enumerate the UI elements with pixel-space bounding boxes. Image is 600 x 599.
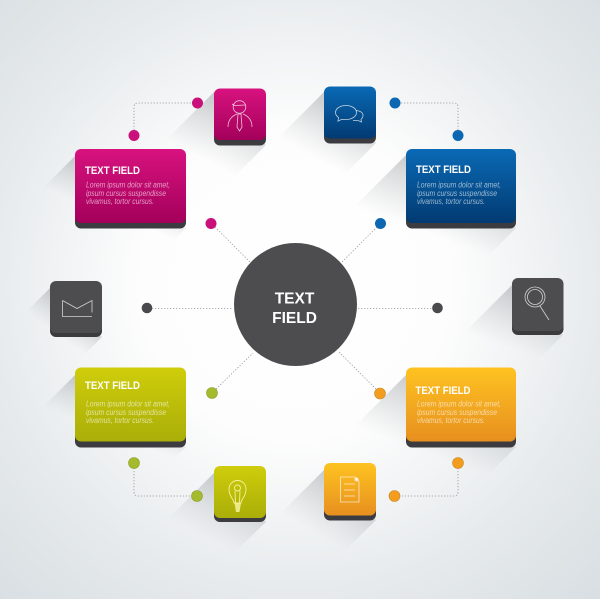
panel: blue text field: vivamus, tortor cursus. [417, 197, 485, 206]
panel: lime text field: Lorem ipsum dolor sit amet, [86, 400, 170, 408]
central label: TEXT [275, 290, 315, 308]
panel: lime text field: ipsum cursus suspendisse [86, 408, 167, 417]
panel: lime text field: vivamus, tortor cursus. [86, 416, 154, 425]
panel: magenta text field: TEXT FIELD [85, 165, 140, 177]
panel: blue text field: Lorem ipsum dolor sit amet, [417, 180, 501, 190]
icon: person [214, 88, 266, 146]
icon: magnifier [512, 278, 564, 335]
icon: document [324, 463, 376, 520]
panel: magenta text field: ipsum cursus suspendisse [86, 189, 167, 198]
panel: lime text field [75, 368, 218, 502]
icon: light bulb [214, 466, 266, 522]
icon: envelope [50, 281, 102, 337]
panel: orange text field: ipsum cursus suspendisse [417, 408, 498, 417]
connector dot: right [432, 303, 443, 313]
panel: orange text field: Lorem ipsum dolor sit amet, [417, 400, 501, 408]
panel: magenta text field: Lorem ipsum dolor sit amet, [86, 180, 170, 190]
panel: blue text field: TEXT FIELD [416, 164, 471, 176]
panel: blue text field [375, 98, 516, 229]
panel: magenta text field: vivamus, tortor cursus. [86, 197, 154, 206]
central label: FIELD [272, 310, 317, 327]
bulb base [234, 503, 241, 512]
panel: orange text field [374, 368, 516, 502]
panel: blue text field: ipsum cursus suspendisse [417, 189, 498, 198]
icon: speech bubbles [324, 86, 376, 144]
central circle [234, 243, 357, 366]
connector: hub spokes [152, 227, 433, 389]
long shadows [0, 92, 563, 599]
panel: magenta text field [75, 98, 216, 229]
connector dot: left [142, 303, 152, 313]
panel: orange text field: TEXT FIELD [416, 385, 471, 397]
panel: lime text field: TEXT FIELD [85, 380, 140, 392]
panel: orange text field: vivamus, tortor cursus. [417, 416, 485, 425]
